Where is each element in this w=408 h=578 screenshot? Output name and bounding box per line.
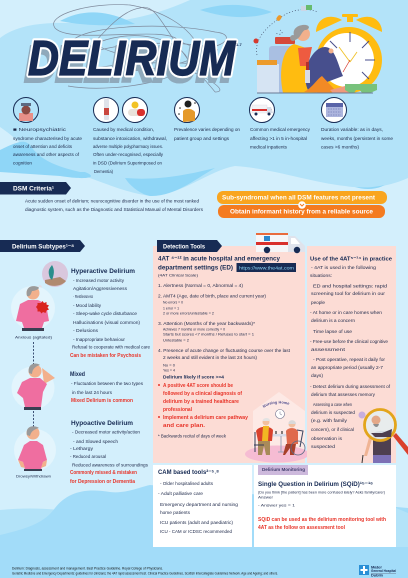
text: CAM content: CAM based tools²⁻⁵˒⁸ <box>158 469 219 476</box>
text: definition: awareness and other aspects of <box>13 152 80 157</box>
text: red notes: professional <box>163 407 193 413</box>
text: red notes: followed by a clinical diagnosis of <box>163 391 242 397</box>
text: definition: onset of attention and deficits <box>13 144 73 149</box>
text: 4AT scale: 3. Attention (Months of the year backwards)* <box>158 321 255 326</box>
text: CAM content <box>158 469 238 534</box>
text: definition: syndrome characterised by acute <box>13 136 82 141</box>
text: definition: cognition <box>13 160 32 166</box>
illustration: nursing home residents playing chess <box>245 392 307 462</box>
text: hyperactive delirium: Hyperactive Delirium <box>71 269 135 275</box>
text: hyperactive delirium: Can be mistaken for Psychosis <box>70 353 141 359</box>
text: mixed delirium: Mixed <box>70 372 85 378</box>
text: hyperactive delirium: Refusal to cooperate with medical care <box>72 344 150 349</box>
text: hypoactive delirium: Hypoactive Delirium <box>71 421 133 427</box>
label: drowsy withdrawn: Drowsy/Withdrawn <box>16 474 51 478</box>
text: mixed delirium <box>70 372 144 404</box>
text: emergency <box>250 127 311 150</box>
text: causes: Caused by medical condition, <box>93 127 154 132</box>
text: use of 4AT: people <box>311 300 325 305</box>
text: 4AT scale: 2. AMT4 (Age, date of birth, place and current year) <box>158 294 266 298</box>
text: hypoactive delirium: - Reduced arousal <box>70 454 106 459</box>
heading: detection tools ribbon: Detection Tools <box>163 244 206 250</box>
text: 4AT scale: Starts but scores <7 months / Refuses to start = 1 <box>163 332 254 336</box>
heading: 4AT: 4AT ⁴⁻¹² in acute hospital and emergency <box>158 255 280 262</box>
text: 4AT scale: Achieves 7 months or more correctly = 0 <box>163 327 225 331</box>
heading: DSM criteria ribbon: DSM Criteria¹ <box>13 185 54 192</box>
text: SQiD: - Answer yes = 1 <box>258 504 295 508</box>
text: prevalence <box>174 127 240 141</box>
text: use of 4AT: Use of the 4AT⁵⁻¹⁴ in practice <box>310 255 393 262</box>
text: 4AT scale: 4. Presence of acute change or fluctuating course over the last <box>158 348 291 353</box>
illustration: nursing home residents playing chess: Nursing Home <box>262 400 290 408</box>
text: 4AT scale: Untestable = 2 <box>163 338 189 342</box>
text: use of 4AT: days) <box>311 373 323 378</box>
illustration: man under magnifying glass <box>358 410 408 463</box>
illustration: ambulance <box>256 233 305 253</box>
text: use of 4AT: concern), or if clinical <box>311 427 354 432</box>
text: 4AT scale: 2 weeks and still evident in the last 24 hours) <box>163 355 257 360</box>
text: use of 4AT: - Detect delirium during assessment of <box>310 384 391 389</box>
text: duration <box>321 127 393 150</box>
text: CAM content: ICU - CAM or ICDSC recommended <box>160 529 232 534</box>
text: CAM content: - Adult palliative care <box>158 491 203 496</box>
icon: ambulance small <box>250 98 274 122</box>
icon: connector chevron <box>298 201 306 209</box>
text: DSM criteria description: Acute sudden onset of delirium; neurocognitive disorder in the use of the most ranked <box>25 198 199 204</box>
text: SQiD <box>258 481 386 531</box>
text: hypoactive delirium: - Lethargy <box>70 446 94 451</box>
text: hypoactive delirium <box>70 421 149 485</box>
text: use of 4AT: assessment <box>311 347 346 352</box>
label: anxious agitated: Anxious (agitated) <box>15 336 52 340</box>
text: hyperactive delirium: - Sleep-wake cycle disturbance <box>73 311 137 316</box>
text: use of 4AT: delirium is suspected <box>311 410 355 415</box>
heading: 4AT: department settings (ED) <box>158 265 233 272</box>
text: emergency: affecting >1 in 5 in-hospital <box>250 136 307 141</box>
text: references footer: Geriatric Medicine and Emergency Departments: guidelines for clinicians; the 4AT rapid assessment test. Clinical Practice Guidelines, Scottish Intercollegiate Guidelines Network. Age and Ageing; and others. <box>12 571 278 575</box>
text: 4AT scale: No = 0 <box>163 363 175 367</box>
text: 4AT scale: 1. Alertness (Normal = 0, Abnormal = 4) <box>158 283 243 288</box>
text: prevalence: patient group and settings <box>174 136 230 141</box>
icon: pills <box>122 98 148 122</box>
text: SQiD: SQiD can be used as the delirium monitoring tool with <box>258 517 386 523</box>
heading: delirium subtypes ribbon <box>0 240 85 252</box>
text: SQiD: Single Question in Delirium (SQiD)¹⁵⁻¹⁶ <box>258 481 373 488</box>
text: causes: adverse multiple polypharmacy issues. <box>93 144 163 149</box>
text: causes <box>93 127 167 174</box>
logo: hospital: General Hospital <box>371 569 396 573</box>
heading: detection tools ribbon <box>157 240 222 252</box>
text: DSM criteria description <box>25 198 204 212</box>
tag: delirium monitoring <box>258 465 308 475</box>
text: definition <box>13 127 82 166</box>
text: mixed delirium: in the last 24 hours <box>72 390 113 395</box>
title: DELIRIUM <box>28 32 236 86</box>
text: use of 4AT: an appropriate period (usually 2-7 <box>311 365 383 370</box>
text: hyperactive delirium: - Inappropriate behaviour <box>73 337 125 342</box>
panel: delirium monitoring <box>254 465 396 547</box>
text: CAM content: Emergency department and nursing <box>160 502 238 507</box>
text: SQiD: 4AT as the follow on assessment tool <box>258 525 346 531</box>
heading: delirium subtypes ribbon: Delirium Subtypes¹⁻⁸ <box>12 244 74 250</box>
title: 1-7 <box>236 42 243 47</box>
scribble tangled lines <box>54 5 226 92</box>
link: the4at.com <box>236 263 296 272</box>
text: hypoactive delirium: for Depression or Dementia <box>70 479 135 485</box>
text: use of 4AT: observation is <box>311 436 343 441</box>
text: causes: in DSD (Delirium Superimposed on <box>93 160 162 166</box>
text: prevalence: Prevalence varies depending on <box>174 127 240 132</box>
panel: CAM based tools <box>153 465 252 547</box>
text: use of 4AT: Time lapse of use <box>313 329 352 334</box>
text: CAM content: - Older hospitalised adults <box>160 481 214 486</box>
text: hypoactive delirium: - Decreased motor activity/action <box>72 429 140 434</box>
text: use of 4AT: delirium that assesses memory <box>311 392 376 397</box>
dashed connectors <box>32 342 34 428</box>
icon: calendar <box>322 98 346 122</box>
logo: hospital <box>359 565 396 578</box>
title: DELIRIUM <box>28 32 236 86</box>
text: hyperactive delirium: - Delusions <box>73 328 99 333</box>
text: use of 4AT: - Free-use before the clinical cognitive <box>310 339 388 344</box>
icon: patient group <box>174 98 200 122</box>
text: references footer: Delirium: Diagnosis, assessment and management. Best Practice Guideline. Royal College of Physicians. <box>12 566 163 570</box>
text: use of 4AT <box>310 255 393 449</box>
text: 4AT scale: (4AT Clinical Scale) <box>158 273 198 277</box>
text: use of 4AT: situations: <box>310 273 332 278</box>
title: DELIRIUM <box>25 38 233 92</box>
pill: informant history: Obtain informant history from a reliable source <box>230 210 374 216</box>
icon: distressed patient <box>14 98 38 122</box>
text: hyperactive delirium: Hallucinations (visual common) <box>73 320 140 325</box>
text: 4AT scale: 2 or more errors/untestable = 2 <box>163 311 214 315</box>
text: hyperactive delirium: - Restlessness <box>73 294 93 299</box>
text: CAM content: ICU patients (adult and paediatric) <box>160 520 233 525</box>
text: definition: ■ Neuropsychiatric <box>13 127 67 132</box>
text: use of 4AT: ED and hospital settings: rapid <box>313 284 387 288</box>
text: footnote: * Backwards recital of days of week <box>158 434 227 438</box>
figure: hyperactive person <box>11 261 68 331</box>
text: causes: Dementia) <box>94 169 113 174</box>
text: emergency: Common medical emergency <box>250 127 311 132</box>
heading: 4AT <box>158 255 280 272</box>
text: use of 4AT: (e.g. with family <box>311 418 348 423</box>
text: 4AT scale <box>158 273 291 380</box>
text: 4AT scale: Yes = 4 <box>163 368 175 372</box>
text: 4AT scale: 1 error = 1 <box>163 306 179 310</box>
pill: sub-syndromal <box>217 191 387 204</box>
text: causes: Often under-recognised, especially <box>93 152 164 157</box>
logo: hospital: Mater <box>371 566 383 570</box>
illustration: elderly woman with alarm clock and medicine <box>254 5 382 94</box>
link: the4at.com: https://www.the4at.com <box>239 266 294 270</box>
text: hyperactive delirium: - Increased motor activity <box>73 278 125 283</box>
text: hypoactive delirium: - and Slowed speech <box>73 439 118 444</box>
text: use of 4AT: delirium is a concern <box>311 318 355 323</box>
text: mixed delirium: - Fluctuation between the two types <box>71 381 144 386</box>
text: hyperactive delirium: Agitation/Aggressiveness <box>73 286 128 291</box>
panel: detection tools <box>153 233 307 463</box>
text: hypoactive delirium: Commonly missed & mistaken <box>70 470 137 476</box>
text: duration: weeks, months (persistent in some <box>321 136 393 141</box>
text: emergency: medical inpatients <box>250 144 288 150</box>
callout: orange pills <box>217 191 387 218</box>
text: use of 4AT: - At home or in care homes when <box>310 310 382 315</box>
text: CAM content: home patients <box>160 510 191 515</box>
text: red notes: and care plan. <box>163 423 206 429</box>
icon: alcohol bottle <box>94 98 118 122</box>
text: hyperactive delirium: - Mood lability <box>73 303 102 308</box>
pill: sub-syndromal: Sub-syndromal when all DSM features not present <box>222 195 375 201</box>
text: duration: Duration variable: as in days, <box>321 127 383 132</box>
figure: hypoactive person <box>14 426 56 471</box>
panel: use of 4AT in practice <box>307 246 408 463</box>
text: use of 4AT: - Post operative, repeat it daily for <box>313 357 385 362</box>
tag: delirium monitoring: Delirium Monitoring <box>262 467 305 473</box>
text: red notes: Implement a delirium care pathway <box>163 415 248 421</box>
text: red notes: delirium by a trained healthcare <box>163 399 239 405</box>
text: use of 4AT: Assessing a case when <box>313 402 352 407</box>
text: use of 4AT: screening tool for delirium in our <box>311 291 385 296</box>
pill: informant history <box>218 205 385 218</box>
text: 4AT scale: No errors = 0 <box>163 300 183 304</box>
text: causes: substance intoxication, withdrawal, <box>93 136 167 141</box>
text: use of 4AT: suspected <box>311 444 335 449</box>
text: 4AT scale: Delirium likely if score >=4 <box>163 374 224 380</box>
heading: DSM criteria ribbon <box>0 182 71 194</box>
figure: mixed person <box>12 364 55 410</box>
text: duration: cases >6 months) <box>321 144 359 150</box>
text: hyperactive delirium <box>70 269 150 359</box>
text: red notes: A positive 4AT score should be <box>163 383 233 389</box>
text: DSM criteria description: diagnostic system, such as the Diagnostic and Statistical Manual of Mental Disorders <box>25 207 204 212</box>
text: references footer <box>12 566 278 575</box>
text: hypoactive delirium: Reduced awareness of surroundings <box>72 462 149 467</box>
logo: hospital: Dublin <box>371 574 383 578</box>
text: SQiD: Answer <box>258 495 274 499</box>
text: red notes <box>158 383 248 429</box>
text: use of 4AT: - 4AT is used in the following <box>311 265 376 270</box>
text: SQiD: (Do you think [the patient] has been more confused lately? Asks family/carer) <box>258 490 385 494</box>
text: mixed delirium: Mixed Delirium is common <box>71 398 133 404</box>
intro row: what is delirium <box>13 98 393 174</box>
